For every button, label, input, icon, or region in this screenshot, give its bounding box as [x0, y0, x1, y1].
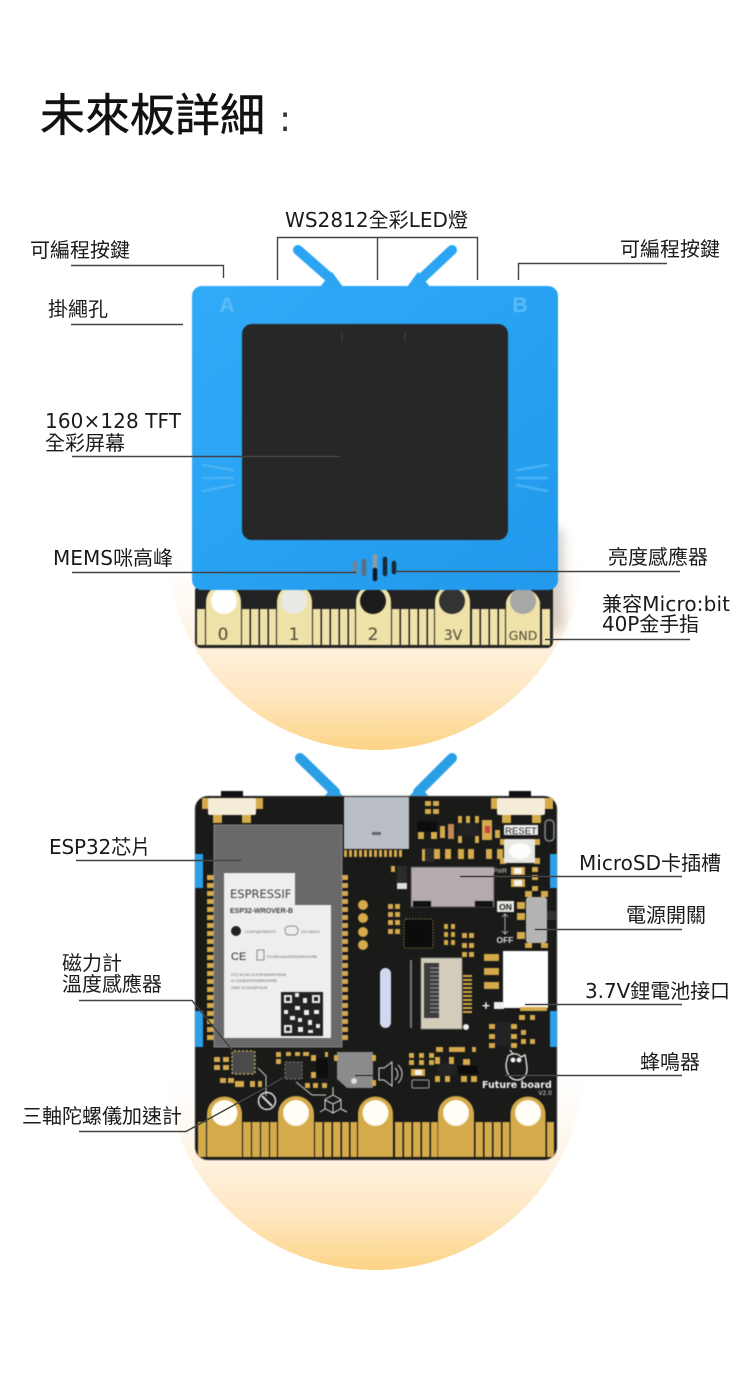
ESP32 module: CE [231, 951, 246, 963]
reset button [500, 820, 554, 864]
board: front view [192, 250, 562, 648]
label: power switch: 電源開關 [626, 903, 706, 927]
icon: antennas [298, 250, 452, 287]
label: lanyard hole: 掛繩孔 [48, 297, 108, 321]
background glow: bottom [165, 850, 585, 1270]
label: gold finger: 兼容Micro:bit [602, 592, 730, 616]
edge connector: 0 [218, 625, 228, 645]
label: gold finger [545, 592, 730, 640]
ESP32 module: ESPRESSIF [230, 887, 291, 901]
ESP32 module: 211-180414 [301, 930, 320, 934]
case shadow [548, 530, 562, 630]
brand text [482, 1080, 552, 1097]
edge connector: 3V [444, 628, 463, 644]
background glow: top [165, 330, 585, 750]
screen [242, 324, 508, 540]
edge connector: 2 [368, 625, 378, 645]
label: light sensor: 亮度感應器 [608, 545, 708, 569]
ESP32 module: ESP32-WROVER-B [230, 908, 293, 915]
label: lanyard hole [48, 297, 183, 324]
reset button: RESET [505, 826, 537, 837]
pcb [195, 796, 557, 1160]
buzzer [334, 1052, 376, 1088]
label: gold finger: 40P金手指 [602, 612, 699, 636]
board: back view [195, 758, 557, 1160]
edge connector: GND [509, 628, 537, 643]
MicroSD slot: PWR [493, 869, 508, 875]
top-right components [391, 801, 503, 890]
label: magnetometer and temperature sensor [62, 951, 232, 1050]
title: : [279, 99, 291, 140]
FPC connector [421, 958, 472, 1030]
brand text: V2.0 [538, 1090, 552, 1097]
label: TFT screen: 160×128 TFT [45, 409, 182, 433]
label: programmable button right: 可編程按鍵 [620, 237, 720, 261]
whiskers [203, 465, 547, 491]
ESP32 module: R-CRM-ss6-ESP32WROVERB [267, 955, 317, 959]
power management chip [489, 1015, 535, 1048]
title: 未來板詳細 [40, 79, 265, 144]
ESP32 module: IC:21098-ESP32WROVERB [231, 979, 277, 983]
label: magnetometer and temperature sensor: 溫度感應器 [62, 972, 162, 996]
label: programmable button right [518, 237, 720, 280]
side tabs [195, 854, 557, 1047]
icon: antennas [300, 758, 452, 798]
side switches [202, 791, 553, 823]
power switch: OFF [496, 935, 514, 945]
gyroscope chip and axis icon [276, 1052, 347, 1113]
battery connector: + [481, 999, 491, 1012]
label: TFT screen: 全彩屏幕 [45, 431, 125, 455]
icon: owl logo [506, 1050, 527, 1080]
label: IMU: 三軸陀螺儀加速計 [22, 1104, 182, 1128]
button marks A and B: B [512, 294, 528, 317]
label: battery connector: 3.7V鋰電池接口 [585, 979, 730, 1003]
label: programmable button left: 可編程按鍵 [30, 238, 130, 262]
label: MEMS microphone: MEMS咪高峰 [53, 546, 173, 570]
QR code [281, 992, 323, 1036]
label: WS2812 LEDs: WS2812全彩LED燈 [285, 208, 468, 232]
edge connector [195, 584, 553, 648]
label: WS2812 LEDs [278, 208, 478, 280]
PWR LEDs [511, 867, 538, 891]
MicroSD slot [411, 867, 508, 907]
LED diffuser slit [380, 960, 412, 1028]
icon: microphone slots [355, 556, 394, 579]
power switch: ON [499, 902, 512, 912]
label: TFT screen [45, 409, 340, 456]
passives above logo [409, 1047, 478, 1088]
ESP32 module [207, 825, 348, 1047]
button marks A and B [219, 294, 528, 317]
ESP32 module: CMIIT ID:2019DP3126 [231, 986, 267, 990]
label: IMU [22, 1078, 283, 1132]
ESP32 module: FCC ID:2AC7Z-ESP32WROVERB [231, 973, 287, 977]
blue case [192, 286, 558, 590]
icon: speaker [379, 1062, 402, 1086]
brand text: Future board [482, 1080, 552, 1091]
label: programmable button left [30, 238, 224, 278]
label: magnetometer and temperature sensor: 磁力計 [62, 951, 122, 975]
label: ESP32 chip: ESP32芯片 [49, 835, 151, 859]
button marks A and B: A [219, 294, 235, 317]
label: MicroSD slot: MicroSD卡插槽 [579, 851, 721, 875]
magnetometer chip and compass [214, 1051, 276, 1110]
power switch [496, 891, 556, 948]
small chip and passives [358, 900, 474, 957]
gold edge connector [198, 1096, 554, 1157]
USB-C connector [344, 797, 409, 857]
ESP32 module: CCAP18LP0820T2 [245, 930, 276, 934]
battery connector [481, 951, 548, 1012]
edge connector: 1 [289, 625, 299, 645]
label: buzzer: 蜂鳴器 [640, 1050, 700, 1074]
